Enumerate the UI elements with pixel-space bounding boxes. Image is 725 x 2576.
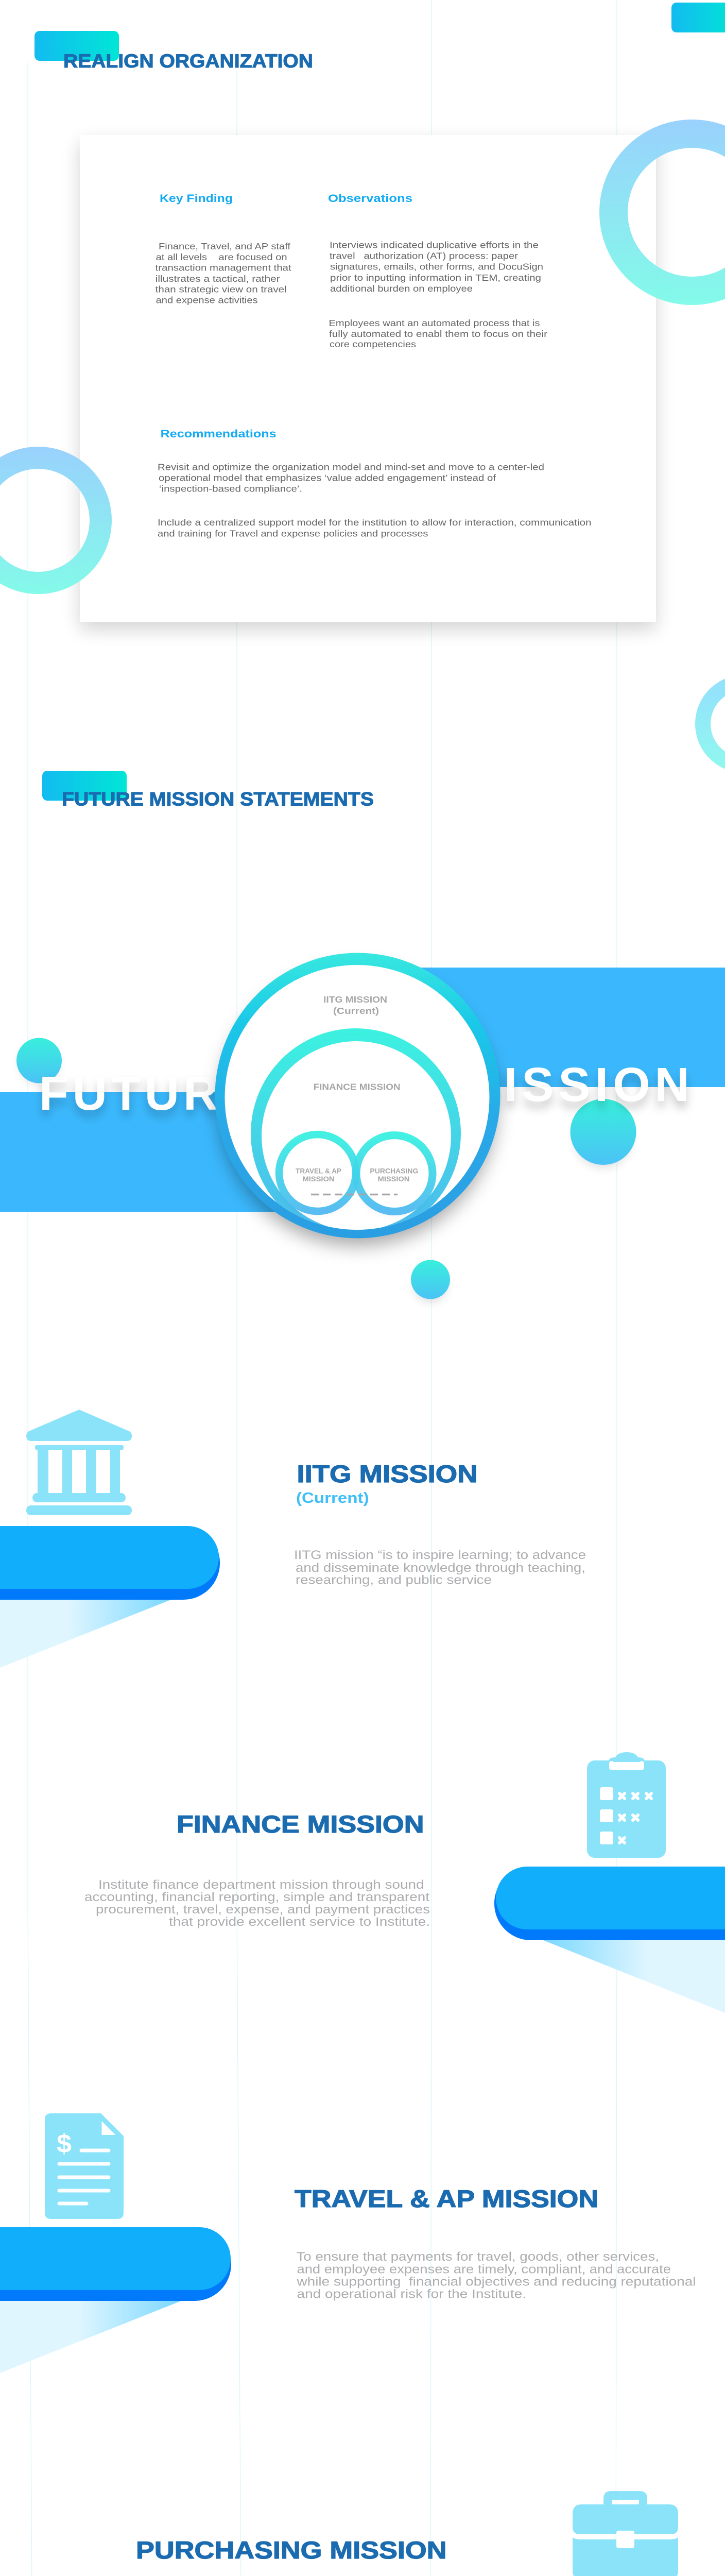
circle labels: IITG MISSION [323, 994, 387, 1005]
nested mission circles diagram [215, 953, 500, 1246]
text: travel and ap mission: and employee expenses are timely, compliant, and accurate [297, 2263, 671, 2276]
travel and purchasing rings [279, 1134, 433, 1213]
observations column: Interviews indicated duplicative efforts in the [330, 240, 539, 250]
recommendations block: and training for Travel and expense policies and processes [158, 528, 428, 538]
text: purchasing mission: PURCHASING MISSION [136, 2536, 447, 2564]
text: travel and ap mission [295, 2185, 696, 2301]
text: finance mission [84, 1810, 430, 1929]
observations column: Observations [328, 193, 412, 205]
band: right blue [402, 968, 725, 1087]
platform: iitg pill with light beam [0, 1526, 220, 1668]
panel: realign organization card [80, 135, 656, 630]
recommendations block: ‘inspection-based compliance’. [159, 484, 302, 494]
key finding column: transaction management that [156, 263, 291, 273]
band: left blue [0, 1092, 288, 1212]
blob: left dot [16, 1038, 62, 1084]
observations column: travel authorization (AT) process: paper [330, 250, 518, 261]
ring: right decoration [599, 120, 725, 305]
text: iitg mission [294, 1460, 586, 1587]
observations column: fully automated to enabl them to focus on their [329, 329, 547, 339]
text: travel and ap mission: and operational risk for the Institute. [297, 2287, 526, 2301]
nested mission circles diagram: MISSION [303, 1175, 335, 1183]
blob: right dot [571, 1099, 636, 1168]
text: iitg mission: researching, and public service [296, 1573, 492, 1587]
ring: upper right small decoration [695, 675, 725, 773]
text: travel and ap mission: To ensure that payments for travel, goods, other services, [297, 2250, 659, 2264]
key finding column: and expense activities [156, 295, 258, 306]
observations column: Employees want an automated process that is [329, 318, 540, 328]
nested mission circles diagram: MISSION [378, 1175, 409, 1183]
section: future mission statements heading: FUTURE MISSION STATEMENTS [62, 788, 374, 810]
observations column: prior to inputting information in TEM, creating [330, 273, 541, 283]
nested mission circles diagram: PURCHASING [370, 1166, 419, 1175]
nested mission circles diagram: TRAVEL & AP [296, 1166, 341, 1175]
recommendations block: operational model that emphasizes ‘value added engagement’ instead of [159, 473, 496, 483]
text: travel and ap mission: while supporting financial objectives and reducing reputational [296, 2275, 696, 2289]
platform: finance pill with light beam [494, 1867, 725, 2013]
icon: invoice document [45, 2113, 124, 2219]
text: iitg mission: (Current) [296, 1490, 369, 1506]
finance ring [251, 1028, 461, 1239]
key finding column: at all levels are focused on [156, 252, 287, 262]
observations column [328, 193, 547, 349]
icon: briefcase [573, 2491, 678, 2576]
text: travel and ap mission: TRAVEL & AP MISSION [295, 2185, 598, 2212]
tab: top right accent [671, 3, 725, 32]
text: finance mission: Institute finance department mission through sound [98, 1878, 424, 1892]
nested mission circles diagram: FINANCE MISSION [314, 1081, 401, 1092]
observations column: core competencies [330, 339, 416, 349]
blob: lower dot [411, 1260, 450, 1302]
big banner word: mission: MISSION [459, 1058, 694, 1111]
text: iitg mission: IITG MISSION [297, 1460, 478, 1487]
section: future mission statements heading [42, 771, 374, 810]
big banner word: future: FUTURE [39, 1066, 258, 1120]
key finding column: illustrates a tactical, rather [156, 274, 280, 284]
background grid lines [28, 0, 617, 1340]
text: iitg mission: IITG mission “is to inspire learning; to advance [294, 1548, 586, 1562]
nested mission circles diagram: (Current) [333, 1006, 379, 1016]
recommendations block: Revisit and optimize the organization model and mind-set and move to a center-led [158, 462, 544, 472]
text: finance mission: FINANCE MISSION [177, 1810, 424, 1838]
text: finance mission: accounting, financial reporting, simple and transparent [84, 1890, 429, 1904]
key finding column: than strategic view on travel [156, 284, 287, 295]
icon: invoice document: $ [57, 2129, 72, 2158]
platform: travel pill with light beam [0, 2227, 231, 2373]
section: realign organization heading [34, 31, 313, 72]
observations column: additional burden on employee [330, 283, 473, 294]
recommendations block: Include a centralized support model for the institution to allow for interaction, communication [158, 517, 591, 528]
key finding column: Key Finding [160, 193, 233, 205]
text: finance mission: procurement, travel, expense, and payment practices [96, 1903, 430, 1917]
key finding column: Finance, Travel, and AP staff [159, 241, 290, 251]
icon: institution building [26, 1410, 132, 1515]
text: iitg mission: and disseminate knowledge through teaching, [296, 1561, 585, 1575]
observations column: signatures, emails, other forms, and DocuSign [330, 262, 543, 272]
text: finance mission: that provide excellent service to Institute. [169, 1915, 430, 1929]
recommendations block: Recommendations [161, 428, 277, 440]
recommendations block [158, 428, 591, 538]
ring: left decoration [0, 447, 112, 594]
background grid lines, middle section [28, 1340, 617, 2576]
key finding column [156, 193, 291, 306]
icon: clipboard checklist [587, 1752, 666, 1858]
section: realign organization heading: REALIGN ORGANIZATION [63, 50, 313, 72]
